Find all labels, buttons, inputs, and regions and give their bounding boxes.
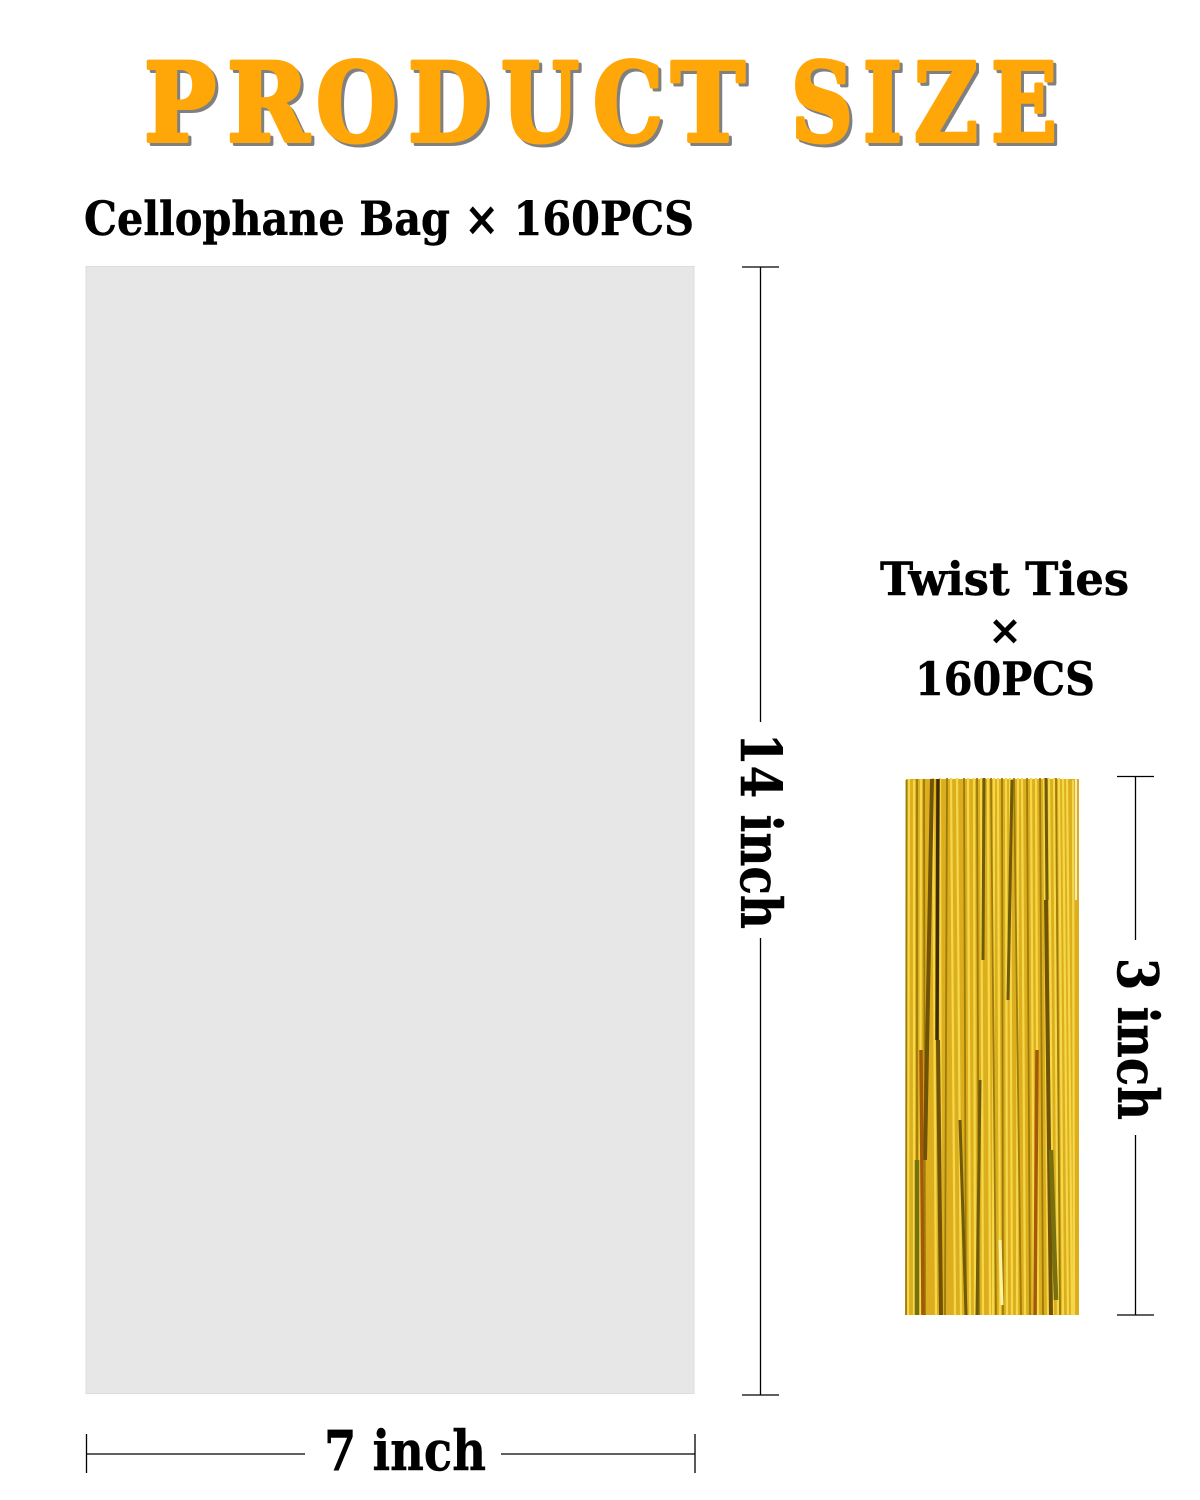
title: P: [147, 42, 219, 170]
title: T: [671, 39, 745, 167]
title: S: [791, 39, 853, 167]
heading: twist ties: ×: [988, 607, 1022, 654]
title: O: [319, 42, 400, 170]
dimension: 7 inch: [86, 1418, 695, 1483]
title: I: [863, 39, 902, 167]
title: R: [230, 42, 313, 170]
title: E: [994, 42, 1060, 170]
title: R: [227, 39, 310, 167]
dimension: 14 inch: 14 inch: [727, 733, 793, 929]
dimension: 7 inch: 7 inch: [324, 1418, 486, 1483]
heading: twist ties: Twist Ties: [880, 552, 1129, 606]
dimension: 3 inch: [1104, 776, 1170, 1315]
title: P: [144, 39, 216, 167]
title: D: [408, 39, 489, 167]
title: Z: [917, 42, 981, 170]
title: O: [316, 39, 397, 167]
title: U: [504, 42, 582, 170]
dimension: 3 inch: 3 inch: [1104, 958, 1170, 1120]
heading: twist ties: [880, 552, 1129, 706]
title: E: [991, 39, 1057, 167]
title: C: [593, 39, 663, 167]
panel: cellophane bag: [86, 266, 694, 1394]
title: [144, 39, 1060, 170]
heading: twist ties: 160PCS: [915, 652, 1095, 706]
title: T: [674, 42, 748, 170]
title: I: [866, 42, 905, 170]
image: gold twist ties: [906, 778, 1079, 1315]
title: D: [411, 42, 492, 170]
dimension: 14 inch: [727, 267, 793, 1395]
title: Z: [914, 39, 978, 167]
title: C: [596, 42, 666, 170]
heading: cellophane bag: Cellophane Bag × 160PCS: [84, 192, 694, 247]
title: S: [794, 42, 856, 170]
title: U: [501, 39, 579, 167]
